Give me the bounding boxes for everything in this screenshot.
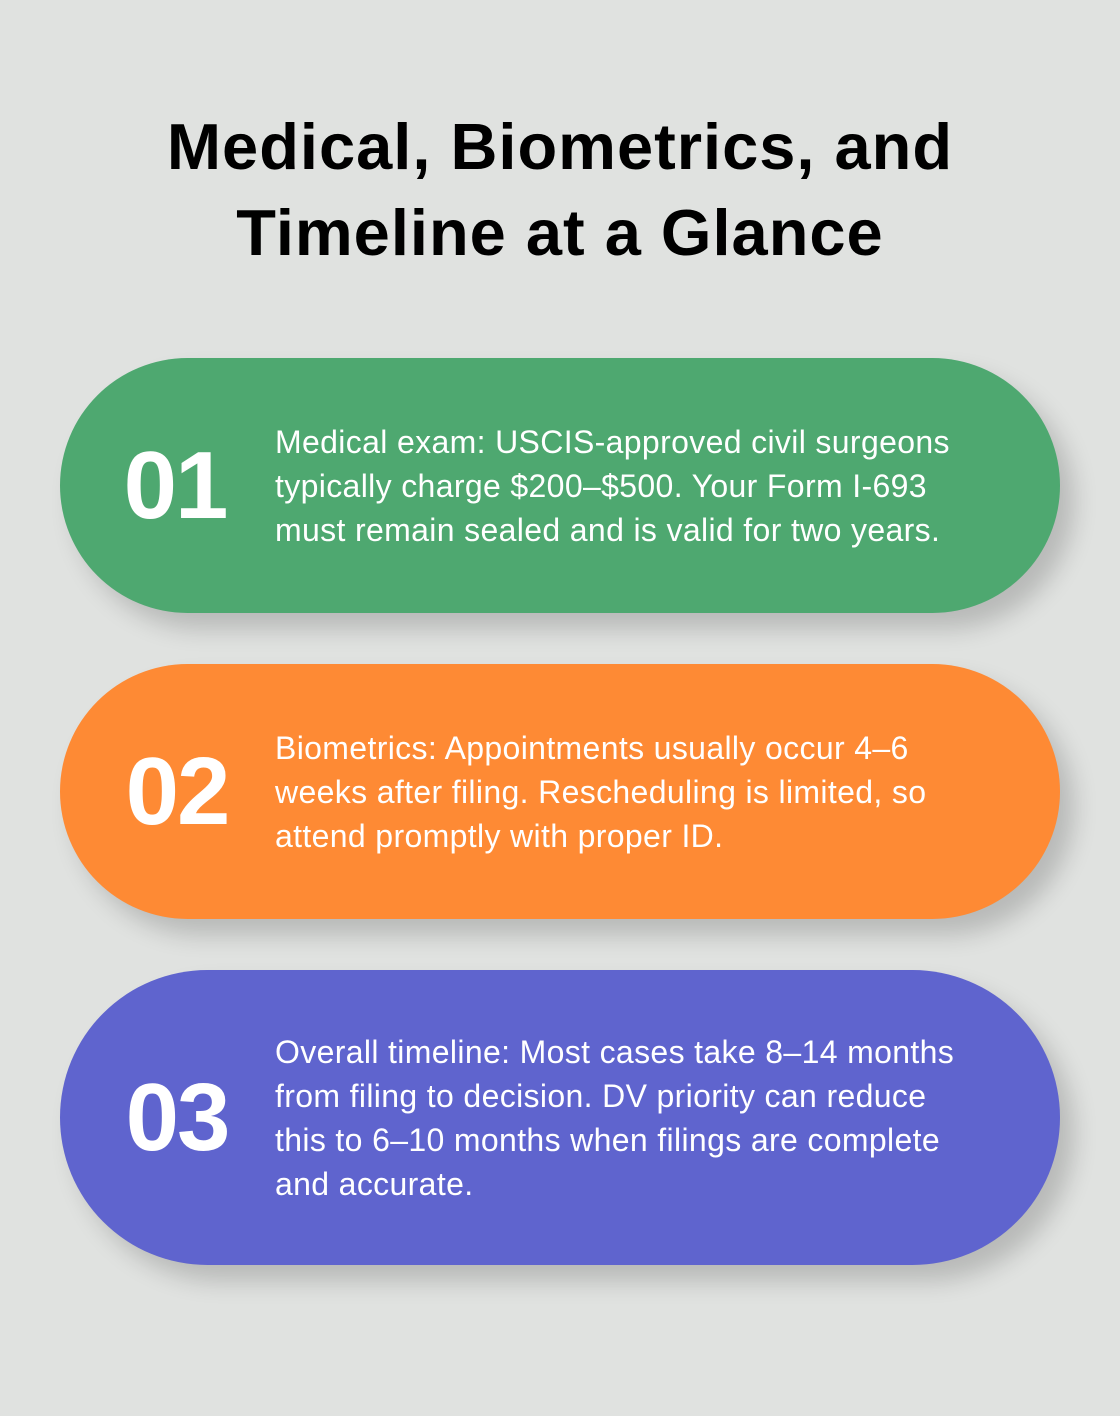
title — [167, 110, 953, 269]
text: biometrics: Biometrics: Appointments usually occur 4–6 — [275, 730, 909, 766]
number 02: 02 — [126, 738, 228, 844]
number 03: 03 — [126, 1064, 228, 1170]
title: Medical, Biometrics, and — [167, 110, 953, 183]
text: overall timeline: Overall timeline: Most cases take 8–14 months — [275, 1034, 954, 1070]
text: medical exam: typically charge $200–$500. Your Form I-693 — [275, 468, 927, 504]
text: biometrics — [275, 730, 926, 854]
number 01: 01 — [124, 432, 226, 538]
text: medical exam: Medical exam: USCIS-approved civil surgeons — [275, 424, 950, 460]
text: biometrics: weeks after filing. Rescheduling is limited, so — [275, 774, 926, 810]
text: overall timeline: and accurate. — [275, 1166, 473, 1202]
text: overall timeline — [275, 1034, 954, 1202]
text: overall timeline: this to 6–10 months when filings are complete — [275, 1122, 940, 1158]
text: overall timeline: from filing to decision. DV priority can reduce — [275, 1078, 926, 1114]
text: medical exam — [275, 424, 950, 548]
panel: biometrics — [60, 664, 1060, 919]
panel: medical exam — [60, 358, 1060, 613]
text: biometrics: attend promptly with proper ID. — [275, 818, 723, 854]
panel: overall timeline — [60, 970, 1060, 1265]
text: medical exam: must remain sealed and is valid for two years. — [275, 512, 940, 548]
title: Timeline at a Glance — [236, 196, 884, 269]
